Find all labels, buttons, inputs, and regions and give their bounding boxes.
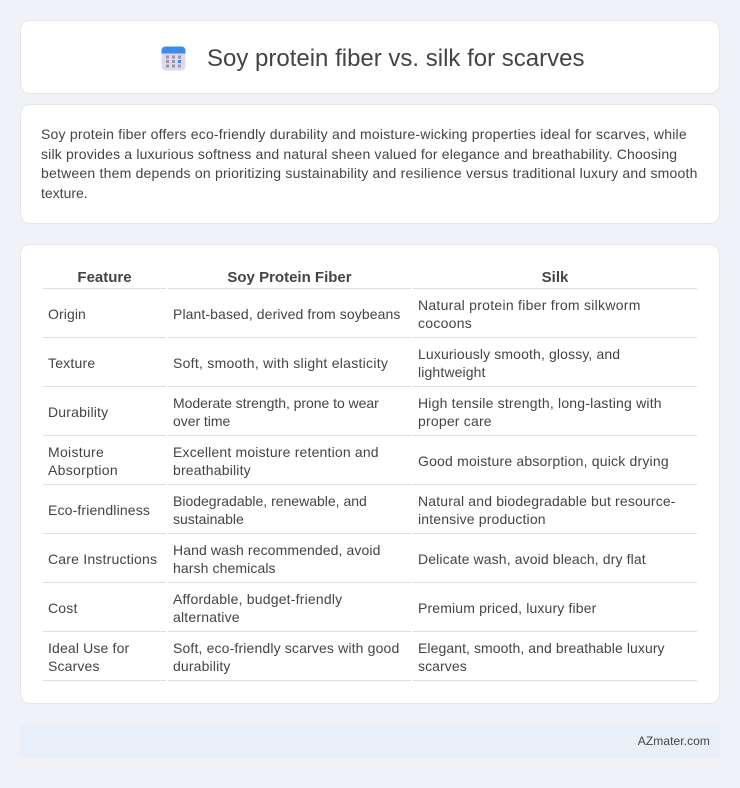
row: Durability: proper care: [418, 413, 492, 429]
text block: summary: texture.: [41, 185, 88, 201]
row: Moisture Absorption: Moisture: [48, 444, 104, 460]
row: Ideal Use for Scarves: durability: [173, 658, 231, 674]
table header: Silk: Silk: [542, 269, 568, 286]
panel: title: [20, 20, 720, 94]
row: Durability: High tensile strength, long-lasting with: [418, 395, 662, 411]
row: Ideal Use for Scarves: Ideal Use for: [48, 640, 129, 656]
footer bar: [20, 724, 720, 758]
row: Texture: lightweight: [418, 364, 486, 380]
row: Origin: Natural protein fiber from silkworm: [418, 297, 641, 313]
text block: summary: between them depends on prioritizing sustainability and resilience versus traditional luxury and smooth: [41, 165, 698, 181]
table header: Feature: Feature: [77, 269, 132, 286]
row: Durability: Durability: [48, 404, 108, 420]
row: Moisture Absorption: Excellent moisture retention and: [173, 444, 379, 460]
row: Texture: Luxuriously smooth, glossy, and: [418, 346, 620, 362]
row: Origin: [43, 297, 697, 338]
row: Cost: Affordable, budget-friendly: [173, 591, 342, 607]
icon: calendar: [162, 46, 186, 70]
row: Origin: Origin: [48, 306, 86, 322]
table header: Soy Protein Fiber: Soy Protein Fiber: [227, 269, 352, 286]
row: Ideal Use for Scarves: Soft, eco-friendly scarves with good: [173, 640, 399, 656]
text block: summary: [41, 126, 698, 201]
panel: comparison table: [20, 244, 720, 704]
row: Cost: alternative: [173, 609, 240, 625]
row: Eco-friendliness: sustainable: [173, 511, 244, 527]
row: Ideal Use for Scarves: [43, 640, 697, 681]
row: Durability: Moderate strength, prone to wear: [173, 395, 379, 411]
heading: Soy protein fiber vs. silk for scarves: [207, 45, 584, 72]
row: Cost: Cost: [48, 600, 78, 616]
row: Eco-friendliness: Biodegradable, renewable, and: [173, 493, 367, 509]
row: Cost: [43, 591, 697, 632]
row: Origin: Plant-based, derived from soybeans: [173, 306, 401, 322]
row: Cost: Premium priced, luxury fiber: [418, 600, 596, 616]
row: Eco-friendliness: Natural and biodegradable but resource-: [418, 493, 676, 509]
row: Care Instructions: Care Instructions: [48, 551, 157, 567]
row: Moisture Absorption: Absorption: [48, 462, 118, 478]
text block: summary: Soy protein fiber offers eco-friendly durability and moisture-wicking properties ideal for scarves, while: [41, 126, 687, 142]
row: Care Instructions: Hand wash recommended, avoid: [173, 542, 380, 558]
row: Ideal Use for Scarves: Elegant, smooth, and breathable luxury: [418, 640, 665, 656]
footer text: AZmater.com: [638, 734, 710, 748]
row: Care Instructions: Delicate wash, avoid bleach, dry flat: [418, 551, 646, 567]
row: Texture: [43, 346, 697, 387]
row: Care Instructions: harsh chemicals: [173, 560, 276, 576]
text block: summary: silk provides a luxurious softness and natural sheen valued for elegance and breathability. Choosing: [41, 146, 677, 162]
row: Ideal Use for Scarves: Scarves: [48, 658, 100, 674]
row: Durability: over time: [173, 413, 230, 429]
row: Texture: Texture: [48, 355, 95, 371]
row: Care Instructions: [43, 542, 697, 583]
row: Eco-friendliness: Eco-friendliness: [48, 502, 150, 518]
row: Durability: [43, 395, 697, 436]
row: Moisture Absorption: [43, 444, 697, 485]
row: Moisture Absorption: Good moisture absorption, quick drying: [418, 453, 669, 469]
row: Ideal Use for Scarves: scarves: [418, 658, 467, 674]
row: Eco-friendliness: [43, 493, 697, 534]
row: Texture: Soft, smooth, with slight elasticity: [173, 355, 388, 371]
row: Moisture Absorption: breathability: [173, 462, 251, 478]
row: Eco-friendliness: intensive production: [418, 511, 546, 527]
row: Origin: cocoons: [418, 315, 472, 331]
panel: introduction: [20, 104, 720, 224]
